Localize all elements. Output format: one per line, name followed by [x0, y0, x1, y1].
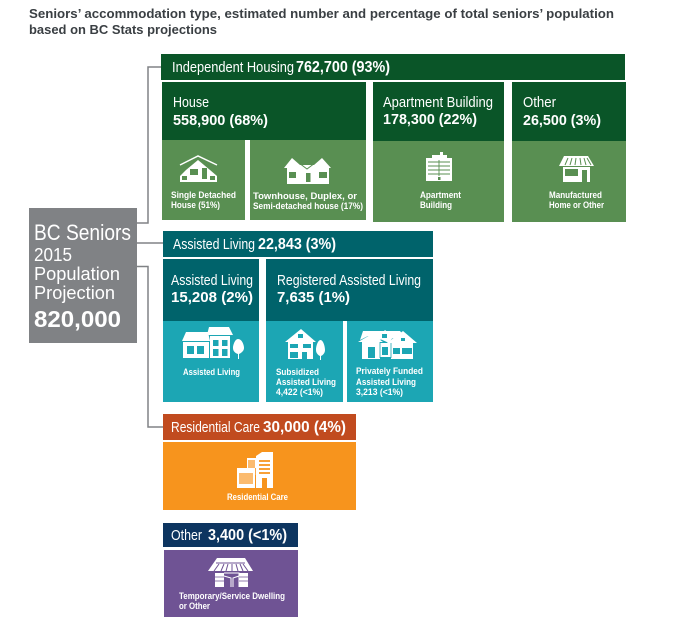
- panel: BC Seniors total: BC Seniors: [34, 220, 131, 245]
- title: based on BC Stats projections: [29, 22, 217, 37]
- panel: registered assisted living: 7,635 (1%): [277, 289, 350, 306]
- panel: assisted living: [163, 231, 433, 402]
- heading: independent housing: 762,700 (93%): [296, 59, 390, 76]
- icon: apartment: [426, 152, 452, 181]
- panel: house: House (51%): [171, 200, 220, 211]
- icon: manufactured home: [559, 156, 594, 182]
- panel: BC Seniors total: Population: [34, 263, 120, 284]
- panel: registered assisted living: Privately Funded: [356, 366, 423, 377]
- panel: registered assisted living: [266, 259, 433, 402]
- heading: other: 3,400 (<1%): [208, 527, 287, 544]
- panel: residential care: [163, 414, 356, 510]
- heading: assisted living: 22,843 (3%): [258, 236, 336, 253]
- icon: assisted living houses: [182, 327, 244, 359]
- icon: residential care building: [237, 452, 273, 488]
- panel: registered assisted living: Subsidized: [276, 367, 319, 378]
- heading: other: [163, 523, 298, 547]
- panel: other independent: Home or Other: [549, 200, 604, 211]
- panel: apartment building: 178,300 (22%): [383, 111, 477, 128]
- panel: residential care: Residential Care: [227, 492, 288, 503]
- panel: house: Semi-detached house (17%): [253, 201, 363, 212]
- heading: residential care: Residential Care: [171, 420, 260, 436]
- heading: assisted living: [163, 231, 433, 257]
- panel: independent housing: [161, 54, 626, 222]
- heading: residential care: 30,000 (4%): [263, 419, 346, 436]
- panel: other: Temporary/Service Dwelling: [179, 591, 285, 602]
- panel: BC Seniors total: 2015: [34, 244, 72, 265]
- panel: house: [162, 82, 366, 220]
- panel: BC Seniors total: 820,000: [34, 306, 121, 332]
- panel: registered assisted living: 3,213 (<1%): [356, 387, 403, 398]
- panel: registered assisted living: Assisted Living: [276, 377, 336, 388]
- panel: other: [163, 523, 298, 617]
- heading: independent housing: [161, 54, 625, 80]
- heading: independent housing: Independent Housing: [172, 60, 294, 76]
- panel: house: House: [173, 95, 209, 111]
- panel: registered assisted living: Registered Assisted Living: [277, 273, 421, 289]
- panel: BC Seniors total: Projection: [34, 282, 115, 303]
- panel: assisted living sub: 15,208 (2%): [171, 289, 253, 306]
- icon: single detached house: [180, 156, 217, 182]
- panel: other independent: [512, 82, 626, 222]
- icon: temporary dwelling: [208, 558, 253, 587]
- panel: house: Single Detached: [171, 190, 236, 201]
- panel: house: Townhouse, Duplex, or: [253, 191, 357, 202]
- icon: townhouse: [284, 158, 331, 184]
- panel: other independent: Manufactured: [549, 190, 602, 201]
- icon: privately funded houses: [358, 330, 417, 359]
- panel: registered assisted living: Assisted Living: [356, 377, 416, 388]
- panel: other independent: Other: [523, 95, 556, 111]
- panel: assisted living sub: Assisted Living: [183, 367, 240, 378]
- title: [29, 6, 614, 37]
- panel: other: or Other: [179, 601, 210, 612]
- panel: apartment building: [373, 82, 504, 222]
- panel: apartment building: Apartment Building: [383, 95, 493, 111]
- panel: BC Seniors total: [29, 208, 137, 343]
- connector lines: [137, 67, 163, 427]
- panel: assisted living sub: [163, 259, 259, 402]
- heading: other: Other: [171, 528, 202, 544]
- heading: assisted living: Assisted Living: [173, 237, 255, 253]
- icon: subsidized house: [285, 329, 325, 360]
- panel: assisted living sub: Assisted Living: [171, 273, 253, 289]
- panel: house: 558,900 (68%): [173, 112, 268, 129]
- heading: residential care: [163, 414, 356, 440]
- panel: apartment building: Building: [420, 200, 452, 211]
- panel: registered assisted living: 4,422 (<1%): [276, 387, 323, 398]
- title: Seniors’ accommodation type, estimated number and percentage of total seniors’ population: [29, 6, 614, 21]
- panel: other independent: 26,500 (3%): [523, 112, 601, 129]
- panel: apartment building: Apartment: [420, 190, 462, 201]
